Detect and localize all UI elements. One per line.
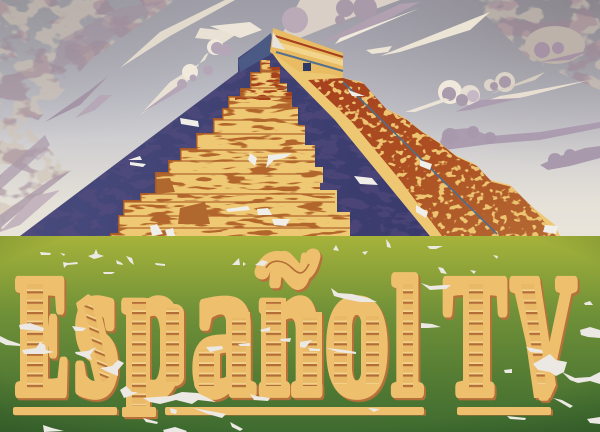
clouds: left streaks: [0, 0, 235, 232]
pyramid: temple: [270, 28, 343, 78]
title letters: [14, 248, 580, 420]
sky: [0, 0, 600, 240]
title letters: l: [392, 244, 423, 430]
cloud: top centre: [280, 0, 420, 44]
pyramid: sunlit staircase side: [270, 50, 560, 236]
title underlines: [13, 407, 551, 415]
title letters: s: [74, 217, 118, 432]
cloud: centre left: [140, 22, 262, 115]
cloud: lower right: [440, 122, 600, 170]
green ground: [0, 236, 600, 432]
contrails: upper right: [366, 12, 490, 56]
pyramid: [20, 28, 560, 238]
title letters: a: [191, 217, 255, 432]
paint chips on ground: [0, 239, 600, 432]
title letters: E: [16, 241, 69, 430]
title letters: o: [324, 218, 389, 432]
cloud: right: [484, 26, 590, 94]
cloud: right middle: [405, 80, 590, 112]
pyramid: paint chips: [128, 90, 558, 238]
title letters: T: [444, 240, 506, 430]
title ladder details: [27, 261, 546, 406]
pyramid: front face: [105, 55, 355, 237]
pyramid: shadow face: [20, 33, 440, 236]
title letters: ñ: [258, 218, 321, 432]
title letters: V: [511, 240, 576, 431]
title: Español TV: [14, 248, 580, 420]
title letters: p: [122, 218, 184, 432]
